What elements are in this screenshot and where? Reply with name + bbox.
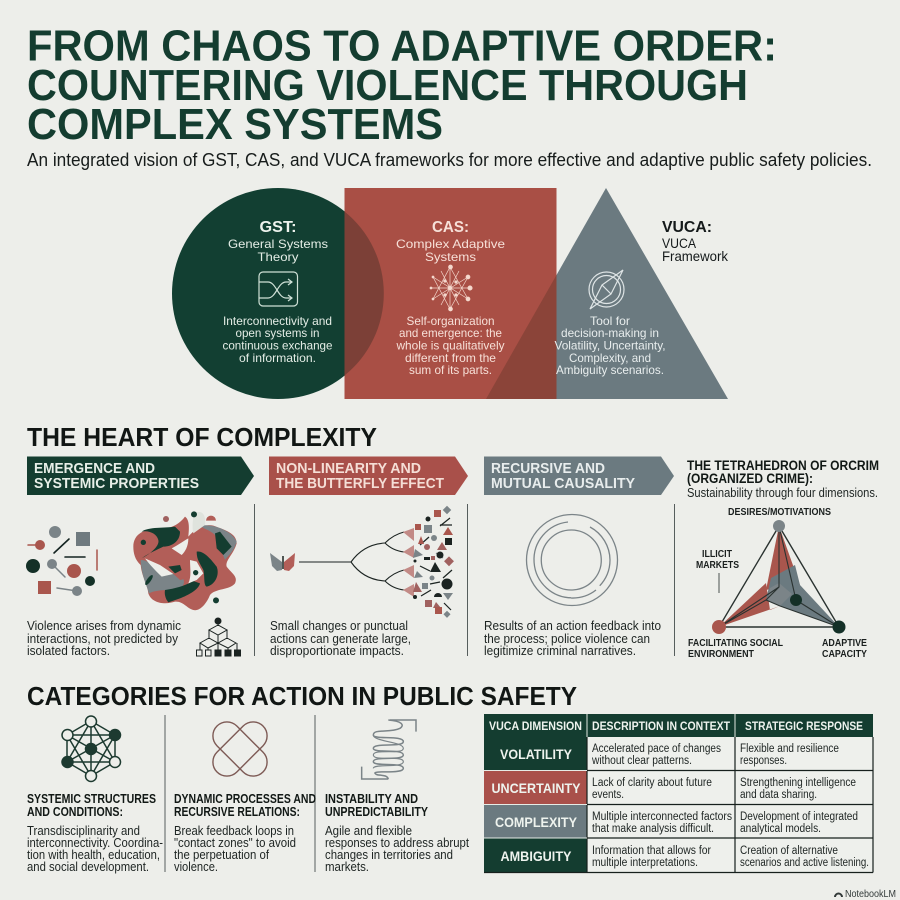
row: ambiguity: multiple interpretations. xyxy=(592,857,698,869)
banner: emergence: EMERGENCE AND xyxy=(34,460,155,477)
text: VUCA description: Tool for xyxy=(590,314,630,328)
row: complexity: Multiple interconnected factors xyxy=(592,811,732,823)
text: CAS: Complex Adaptive xyxy=(396,237,505,251)
shape: circle and square overlap xyxy=(344,212,384,376)
icon: interlocking loops xyxy=(207,716,273,782)
text: non-linearity description: actions can generate large, xyxy=(270,631,411,646)
text: systemic structures: Transdisciplinarity and xyxy=(27,823,140,838)
icon: shuffle arrows xyxy=(259,272,298,306)
shape: VUCA triangle xyxy=(486,188,728,399)
text: non-linearity description: Small changes or punctual xyxy=(270,618,408,633)
subtitle: An integrated vision of GST, CAS, and VUCA frameworks for more effective and adaptive public safety policies. xyxy=(27,150,872,170)
icon: fragmenting shapes xyxy=(413,506,454,618)
row: complexity: Development of integrated xyxy=(740,811,858,823)
text: VUCA description: Volatility, Uncertainty, xyxy=(554,338,666,352)
text: systemic structures: interconnectivity. Coordina- xyxy=(27,835,163,850)
text: systemic structures xyxy=(27,823,163,874)
row: complexity xyxy=(484,804,858,838)
chart: tetrahedron xyxy=(712,520,846,634)
row: volatility: Flexible and resilience xyxy=(740,743,839,755)
text: CAS: Systems xyxy=(425,250,476,264)
text: VUCA description: Complexity, and xyxy=(569,351,651,365)
table header xyxy=(484,714,873,737)
text: CAS: and emergence: the xyxy=(399,326,502,340)
row: complexity: that make analysis difficult. xyxy=(592,823,714,835)
text: recursive description xyxy=(484,618,661,658)
panel: tetrahedron of orcrim xyxy=(687,458,879,660)
text: dynamic processes xyxy=(174,823,296,874)
banner: recursive causality: RECURSIVE AND xyxy=(491,460,605,477)
text: dynamic processes: violence. xyxy=(174,859,218,874)
label: adaptive capacity: CAPACITY xyxy=(822,648,867,660)
row: uncertainty: Strengthening intelligence xyxy=(740,777,856,789)
row: volatility xyxy=(484,737,839,770)
text: VUCA description: Ambiguity scenarios. xyxy=(556,363,664,377)
icon: network hexagon xyxy=(62,716,120,782)
row: ambiguity xyxy=(484,838,869,872)
heading: instability: UNPREDICTABILITY xyxy=(325,805,429,819)
table: VUCA dimensions xyxy=(484,714,873,872)
banner: non-linearity: THE BUTTERFLY EFFECT xyxy=(276,475,444,492)
divider xyxy=(165,715,315,872)
text: VUCA heading xyxy=(662,219,729,264)
label: illicit markets xyxy=(696,548,739,593)
icon: spring xyxy=(362,720,416,779)
table header: VUCA DIMENSION xyxy=(489,719,582,733)
banner: recursive causality: MUTUAL CAUSALITY xyxy=(491,475,635,492)
text: recursive description: legitimize criminal narratives. xyxy=(484,643,636,658)
text: instability: changes in territories and xyxy=(325,847,453,862)
panel: recursive causality xyxy=(484,456,674,658)
heading: dynamic processes xyxy=(174,792,316,819)
text: VUCA description xyxy=(554,314,666,377)
text: systemic structures: and social development. xyxy=(27,859,149,874)
label: illicit markets: MARKETS xyxy=(696,559,739,571)
row: ambiguity: Creation of alternative xyxy=(740,845,838,857)
row: volatility: VOLATILITY xyxy=(500,746,573,762)
title: COUNTERING VIOLENCE THROUGH xyxy=(27,62,748,110)
text: GST: Interconnectivity and xyxy=(223,314,332,328)
row: uncertainty: UNCERTAINTY xyxy=(492,780,581,796)
row: volatility: Accelerated pace of changes xyxy=(592,743,721,755)
heading: tetrahedron xyxy=(687,458,879,500)
text: non-linearity description: disproportionate impacts. xyxy=(270,643,404,658)
banner: non-linearity xyxy=(269,456,468,495)
label: desires/motivations: DESIRES/MOTIVATIONS xyxy=(728,506,831,518)
heading: tetrahedron: (ORGANIZED CRIME): xyxy=(687,471,813,486)
text: instability: Agile and flexible xyxy=(325,823,412,838)
heading: dynamic processes: RECURSIVE RELATIONS: xyxy=(174,805,300,819)
heading: systemic structures: AND CONDITIONS: xyxy=(27,805,123,819)
heading: instability xyxy=(325,792,429,819)
row: complexity: analytical models. xyxy=(740,823,821,835)
shape: CAS square xyxy=(344,188,556,399)
heading: instability: INSTABILITY AND xyxy=(325,792,418,806)
icon: radial network xyxy=(430,265,472,311)
text: emergence description xyxy=(27,618,181,658)
label: adaptive capacity xyxy=(822,637,867,660)
text: systemic structures: tion with health, education, xyxy=(27,847,160,862)
panel: non-linearity xyxy=(269,456,468,658)
text: instability: markets. xyxy=(325,859,369,874)
text: CAS: CAS: xyxy=(432,219,469,236)
text: instability: responses to address abrupt xyxy=(325,835,469,850)
heading: systemic structures xyxy=(27,792,156,819)
row: volatility: responses. xyxy=(740,755,787,767)
row: uncertainty xyxy=(484,770,856,804)
text: dynamic processes: "contact zones" to avoid xyxy=(174,835,296,850)
row: uncertainty: events. xyxy=(592,789,624,801)
text: CAS: sum of its parts. xyxy=(409,363,492,377)
text: dynamic processes: Break feedback loops in xyxy=(174,823,294,838)
text: VUCA heading: VUCA: xyxy=(662,219,712,236)
row: uncertainty: Lack of clarity about future xyxy=(592,777,712,789)
icon: butterfly xyxy=(270,553,295,571)
title xyxy=(27,22,777,149)
row: ambiguity: scenarios and active listening. xyxy=(740,857,869,869)
label: illicit markets: ILLICIT xyxy=(702,548,732,560)
text: CAS xyxy=(396,219,505,377)
panel: systemic structures xyxy=(27,716,163,874)
heading: systemic structures: SYSTEMIC STRUCTURES xyxy=(27,792,156,806)
divider xyxy=(254,504,674,656)
text: GST xyxy=(222,219,333,365)
label: facilitating social environment xyxy=(688,637,783,660)
icon: emergent blob xyxy=(133,511,237,610)
text: emergence description: Violence arises from dynamic xyxy=(27,618,181,633)
label: facilitating social environment: FACILITATING SOCIAL xyxy=(688,637,783,649)
text: VUCA heading: Framework xyxy=(662,248,729,264)
text: GST: Theory xyxy=(258,250,298,264)
banner: emergence xyxy=(27,456,254,495)
title: COMPLEX SYSTEMS xyxy=(27,101,443,149)
icon: scattered elements xyxy=(26,526,97,596)
text: VUCA description: decision-making in xyxy=(561,326,659,340)
heading: tetrahedron: THE TETRAHEDRON OF ORCRIM xyxy=(687,458,879,473)
banner: recursive causality xyxy=(484,456,674,495)
heading: tetrahedron: Sustainability through four dimensions. xyxy=(687,486,878,500)
heading: the heart of complexity: THE HEART OF COMPLEXITY xyxy=(27,424,377,452)
row: ambiguity: Information that allows for xyxy=(592,845,711,857)
banner: non-linearity: NON-LINEARITY AND xyxy=(276,460,421,477)
row: complexity: COMPLEXITY xyxy=(495,814,578,830)
label: facilitating social environment: ENVIRONMENT xyxy=(688,648,754,660)
row: ambiguity: AMBIGUITY xyxy=(500,848,572,864)
shape: triangle and square overlap xyxy=(486,275,556,399)
text: emergence description: isolated factors. xyxy=(27,643,110,658)
shape: GST circle xyxy=(172,188,384,399)
text: GST: continuous exchange xyxy=(222,338,333,352)
heading: categories for action: CATEGORIES FOR ACTION IN PUBLIC SAFETY xyxy=(27,683,577,711)
icon: compass xyxy=(589,270,624,309)
text: emergence description: interactions, not predicted by xyxy=(27,631,178,646)
venn diagram: GST, CAS, VUCA xyxy=(172,188,729,399)
text: recursive description: the process; police violence can xyxy=(484,631,650,646)
text: GST: GST: xyxy=(260,219,296,236)
panel: dynamic processes xyxy=(174,716,316,874)
label: adaptive capacity: ADAPTIVE xyxy=(822,637,867,649)
text: GST: open systems in xyxy=(236,326,320,340)
table header: STRATEGIC RESPONSE xyxy=(745,719,863,733)
heading: dynamic processes: DYNAMIC PROCESSES AND xyxy=(174,792,316,806)
text: CAS: whole is qualitatively xyxy=(396,338,504,352)
panel: instability xyxy=(325,720,469,874)
icon: hierarchy xyxy=(196,618,240,656)
row: uncertainty: and data sharing. xyxy=(740,789,817,801)
icon: concentric feedback loops xyxy=(526,514,618,606)
text: instability xyxy=(325,823,469,874)
text: non-linearity description xyxy=(270,618,411,658)
text: GST: of information. xyxy=(239,351,316,365)
text: CAS: different from the xyxy=(405,351,496,365)
text: dynamic processes: the perpetuation of xyxy=(174,847,269,862)
text: recursive description: Results of an action feedback into xyxy=(484,618,661,633)
text: GST: General Systems xyxy=(228,237,328,251)
chart: branching tree xyxy=(299,528,414,597)
text: VUCA heading: VUCA xyxy=(662,235,697,251)
title: FROM CHAOS TO ADAPTIVE ORDER: xyxy=(27,22,777,70)
table header: DESCRIPTION IN CONTEXT xyxy=(592,719,731,733)
panel: emergence xyxy=(26,456,254,658)
text: CAS: Self-organization xyxy=(406,314,494,328)
row: volatility: without clear patterns. xyxy=(591,755,692,767)
banner: emergence: SYSTEMIC PROPERTIES xyxy=(34,475,199,492)
